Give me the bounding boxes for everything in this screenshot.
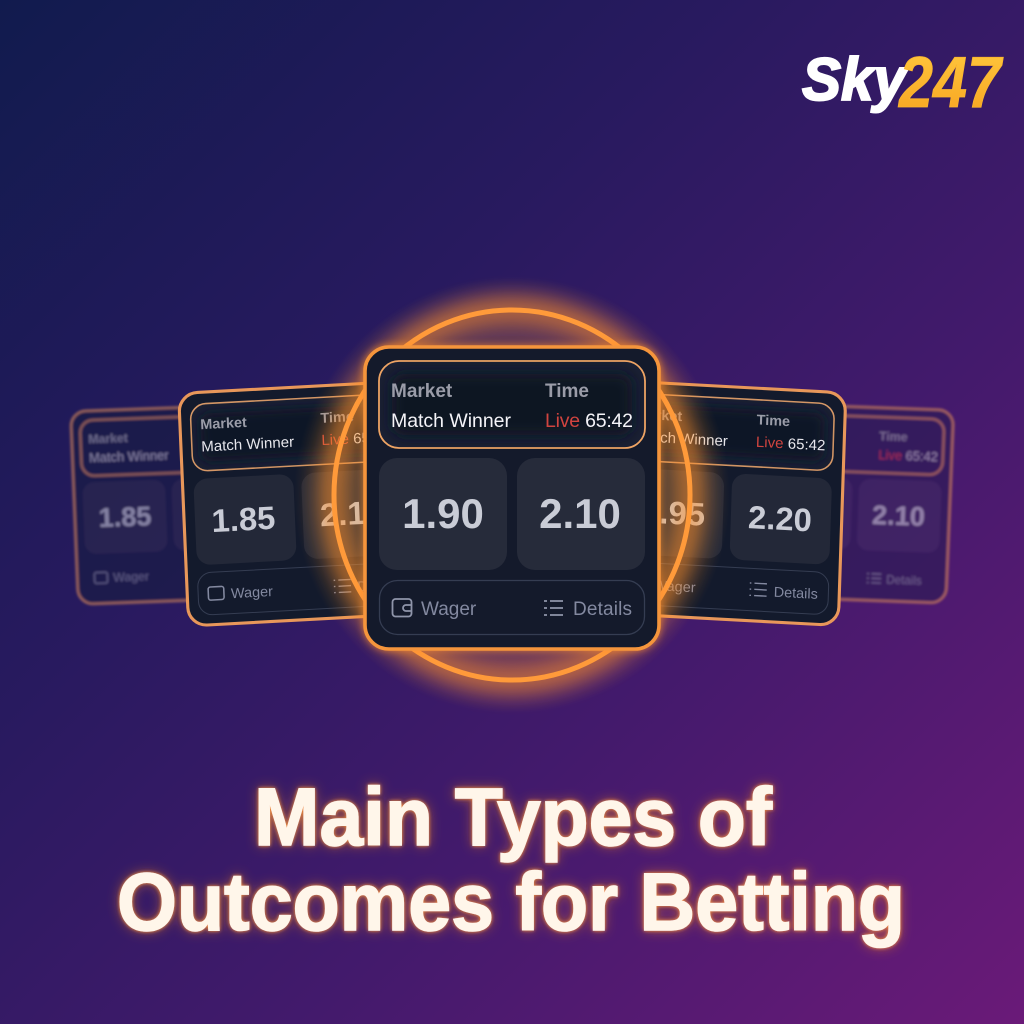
right card: Details: [773, 585, 818, 603]
far left card: Market: [88, 431, 128, 446]
footer actions: [380, 580, 644, 634]
right card: Match Winner: [635, 428, 728, 450]
right card: Wager: [653, 578, 696, 596]
right card: Time: [756, 413, 790, 430]
right card: 2.20: [748, 499, 812, 538]
odds tile 1.90: [379, 458, 507, 570]
left card: Time: [320, 409, 354, 427]
logo: Sky247: [802, 43, 1004, 123]
left card: 1.85: [211, 500, 276, 539]
left card: Wager: [231, 584, 274, 602]
title: Outcomes for Betting: [117, 857, 905, 948]
logo: Sky247: Sky: [802, 46, 909, 113]
far right card: Live 65:42: [878, 447, 938, 464]
far left card: Match Winner: [89, 448, 170, 465]
odds tile 2.10: 2.10: [539, 490, 621, 537]
title: [117, 772, 905, 948]
left card: [179, 381, 418, 626]
left card: Details: [357, 577, 402, 595]
left card: 2.10: [319, 494, 385, 533]
far right card: [756, 403, 954, 603]
far right card: Details: [886, 574, 922, 588]
right card: [609, 381, 846, 626]
icon: list: [544, 601, 563, 615]
left card: Live 65:42: [321, 429, 391, 449]
header panel: market and time: Live 65:42: [545, 410, 633, 432]
far left card: 1.85: [98, 501, 152, 533]
header panel: market and time: Match Winner: [391, 410, 512, 432]
right card: Market: [635, 407, 683, 425]
glowing orange ring: [294, 277, 730, 713]
far left card: [70, 404, 268, 605]
left card: Match Winner: [201, 434, 294, 456]
right card: Live 65:42: [756, 434, 826, 454]
footer actions: Wager: [421, 599, 477, 620]
right card: 1.95: [641, 494, 706, 533]
logo: Sky247: 247: [897, 43, 1004, 123]
main card: [363, 345, 661, 651]
header panel: market and time: [379, 361, 645, 448]
header panel: market and time: Market: [391, 381, 453, 402]
far right card: Time: [879, 429, 908, 444]
footer actions: Details: [573, 599, 632, 620]
title: Main Types of: [254, 772, 773, 863]
icon: wallet: [392, 599, 412, 616]
header panel: market and time: Time: [545, 381, 589, 402]
far left card: Wager: [113, 569, 149, 584]
left card: Market: [200, 415, 247, 433]
odds tile 2.10: [517, 458, 645, 570]
far right card: 2.10: [872, 500, 926, 532]
odds tile 1.90: 1.90: [402, 490, 484, 537]
